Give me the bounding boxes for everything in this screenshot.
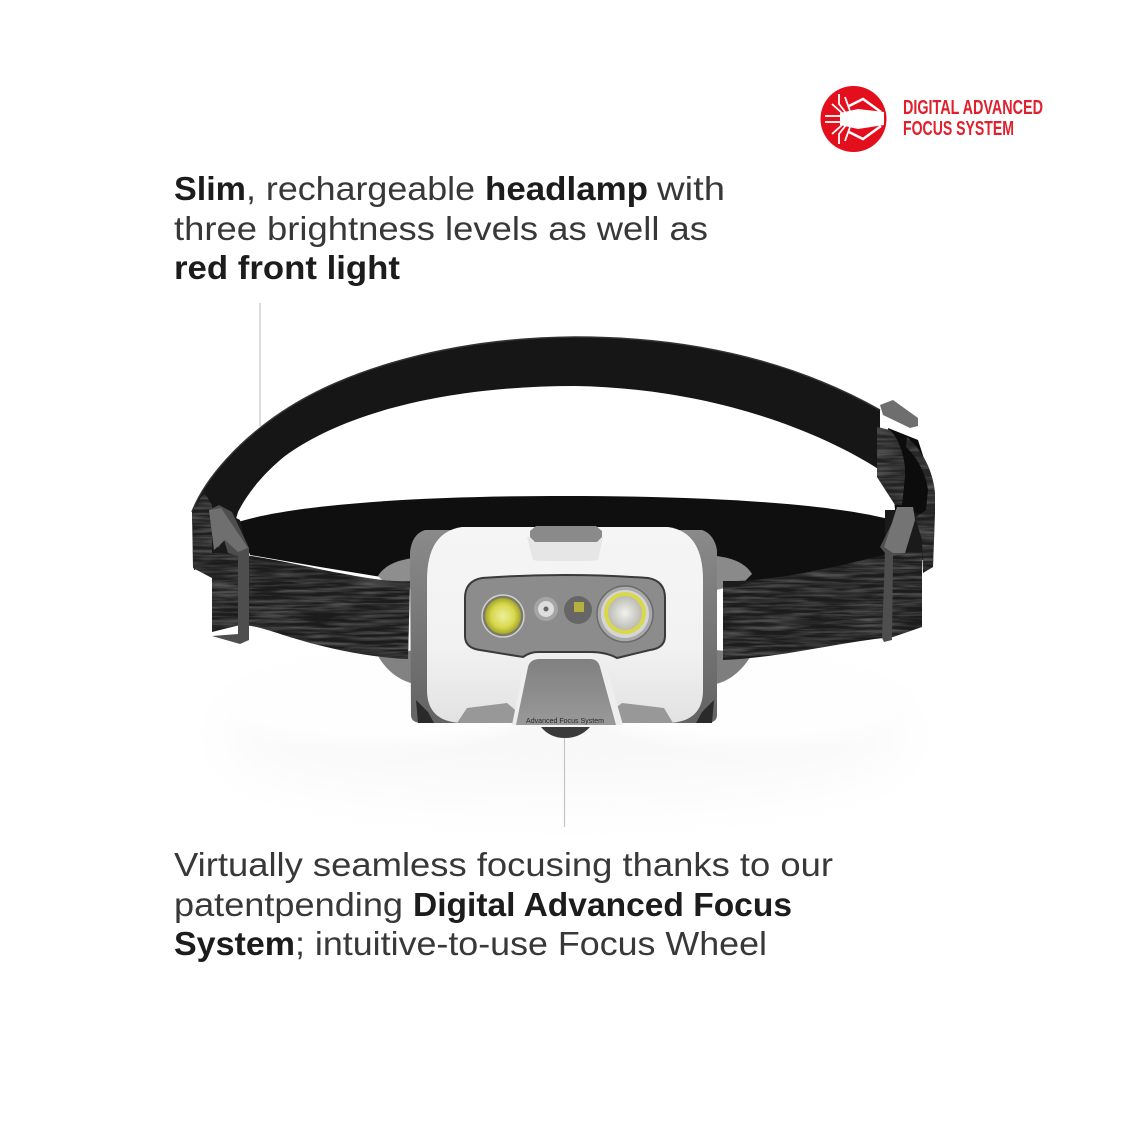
top text block: red front light (174, 249, 400, 286)
logo wordmark: FOCUS SYSTEM (903, 118, 1014, 140)
small red light lens (534, 597, 558, 621)
leader line: top (259, 303, 261, 426)
bottom text block (174, 846, 833, 962)
lamp housing (410, 530, 717, 723)
top button (527, 526, 603, 561)
right upper clip (880, 400, 918, 428)
bottom text block: patentpending (174, 886, 403, 923)
top text block: with (656, 170, 725, 207)
top text block: headlamp (485, 170, 648, 207)
icon: red circle with lamp and circuit (820, 86, 886, 152)
right lens (597, 586, 653, 642)
focus slider base wings (457, 703, 673, 723)
sensor (564, 596, 592, 624)
upper head strap (192, 337, 880, 578)
side brackets (378, 556, 752, 684)
leader line: bottom (564, 738, 566, 827)
logo wordmark: DIGITAL ADVANCED (903, 97, 1043, 119)
focus slider: Advanced Focus System (526, 718, 604, 725)
logo: Digital Advanced Focus System (820, 86, 1043, 152)
left front strap (212, 553, 410, 659)
buckle backing (212, 505, 925, 560)
bottom text block: ; intuitive-to-use Focus Wheel (295, 925, 767, 962)
bottom text block: System (174, 925, 295, 962)
front window (465, 575, 665, 658)
headlamp product image (192, 337, 935, 738)
top text block: , rechargeable (246, 170, 475, 207)
top text block (174, 170, 725, 286)
bottom text block: Virtually seamless focusing thanks to our (174, 846, 833, 883)
top text block: three brightness levels as well as (174, 210, 708, 247)
logo wordmark (903, 97, 1043, 140)
focus wheel (541, 727, 590, 738)
focus slider (512, 654, 623, 725)
right side strap loop (877, 427, 935, 573)
left lens (482, 595, 524, 637)
left buckle (209, 505, 249, 644)
rear inner strap (238, 496, 892, 582)
right front strap (723, 552, 922, 660)
floor reflection (225, 668, 905, 795)
top text block: Slim (174, 170, 246, 207)
housing dark corners (416, 700, 714, 723)
bottom text block: Digital Advanced Focus (413, 886, 792, 923)
right buckle (880, 507, 915, 642)
lamp white face (427, 527, 703, 723)
